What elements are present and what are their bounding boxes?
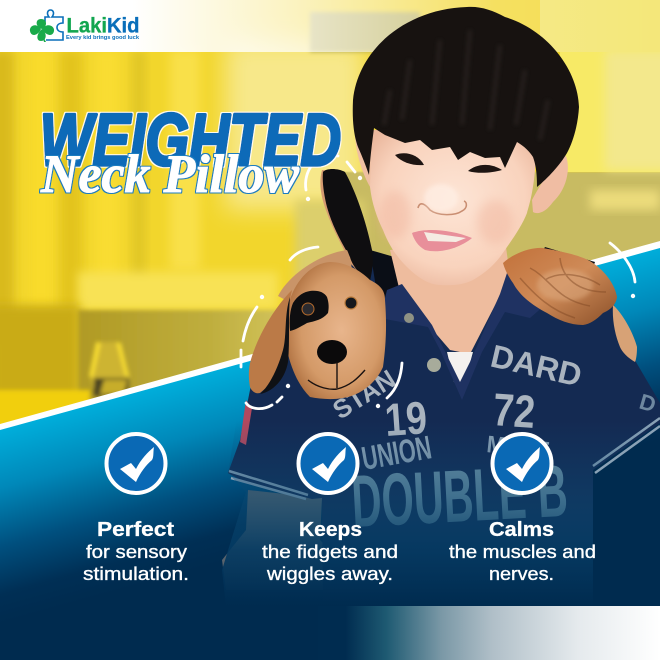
floppy ear (249, 290, 292, 393)
benefit: keeps: wiggles away. (266, 564, 393, 584)
eyes (395, 153, 502, 173)
nose (418, 184, 466, 215)
body on right shoulder (503, 247, 617, 325)
logo puzzle icon (45, 10, 63, 40)
shirt lettering: DARD (487, 338, 585, 394)
eye (345, 297, 357, 309)
logo (30, 10, 140, 42)
benefit: keeps: the fidgets and (262, 542, 398, 562)
shirt (228, 252, 660, 606)
shirt lettering: UNION (359, 428, 434, 477)
shirt lettering: 72 (491, 383, 537, 438)
check icon (492, 434, 552, 493)
shirt lettering: STAN (327, 364, 401, 425)
logo tagline: Every kid brings good luck (66, 35, 140, 41)
benefit: calms: nerves. (489, 564, 554, 584)
mouth (308, 362, 365, 389)
logo clover (30, 19, 54, 42)
benefit: calms: the muscles and (449, 542, 596, 562)
benefit: calms: Calms (489, 519, 554, 541)
blue diagonal panel (0, 241, 660, 660)
title: weighted: WEIGHTED (40, 100, 341, 181)
shirt lettering: MUST (485, 431, 550, 464)
glass on table (89, 342, 130, 396)
shirt lettering: D (637, 389, 659, 417)
boy (220, 7, 660, 606)
standing ear (320, 170, 372, 282)
hair highlights (384, 30, 548, 140)
benefit: perfect: Perfect (97, 519, 174, 541)
logo wordmark: LakiKid (66, 14, 140, 38)
head (287, 262, 386, 399)
arm and hand (222, 490, 370, 590)
bottom right white fade (318, 606, 660, 660)
mouth (412, 230, 472, 251)
sleeve patch (240, 400, 252, 445)
eye patch (290, 291, 329, 331)
left ear (355, 133, 374, 190)
benefit: calms (449, 434, 596, 584)
title (40, 100, 341, 204)
dog pillow (249, 169, 637, 399)
face (370, 130, 537, 285)
shirt lettering: 19 (383, 391, 429, 446)
benefit: perfect: stimulation. (83, 564, 189, 584)
undershirt (447, 352, 473, 385)
cheek blush (379, 191, 411, 239)
collar (380, 270, 545, 400)
title: neck pillow: Neck Pillow (40, 144, 300, 204)
decorative white arcs around dog (241, 155, 635, 409)
neck (390, 240, 510, 354)
nose (317, 340, 347, 364)
shirt lettering (327, 338, 659, 543)
benefit: keeps: Keeps (299, 519, 362, 541)
sleeve stripes (229, 418, 660, 499)
benefit: perfect: for sensory (86, 542, 187, 562)
benefit: perfect (83, 434, 189, 584)
check icon (106, 434, 166, 493)
check icon (298, 434, 358, 493)
lower shirt fade overlay (222, 428, 644, 606)
right ear (532, 156, 568, 213)
benefit: keeps (262, 434, 398, 584)
hair (353, 7, 579, 187)
top white fade band (0, 0, 660, 52)
tail (613, 305, 637, 362)
back of head (278, 250, 352, 305)
